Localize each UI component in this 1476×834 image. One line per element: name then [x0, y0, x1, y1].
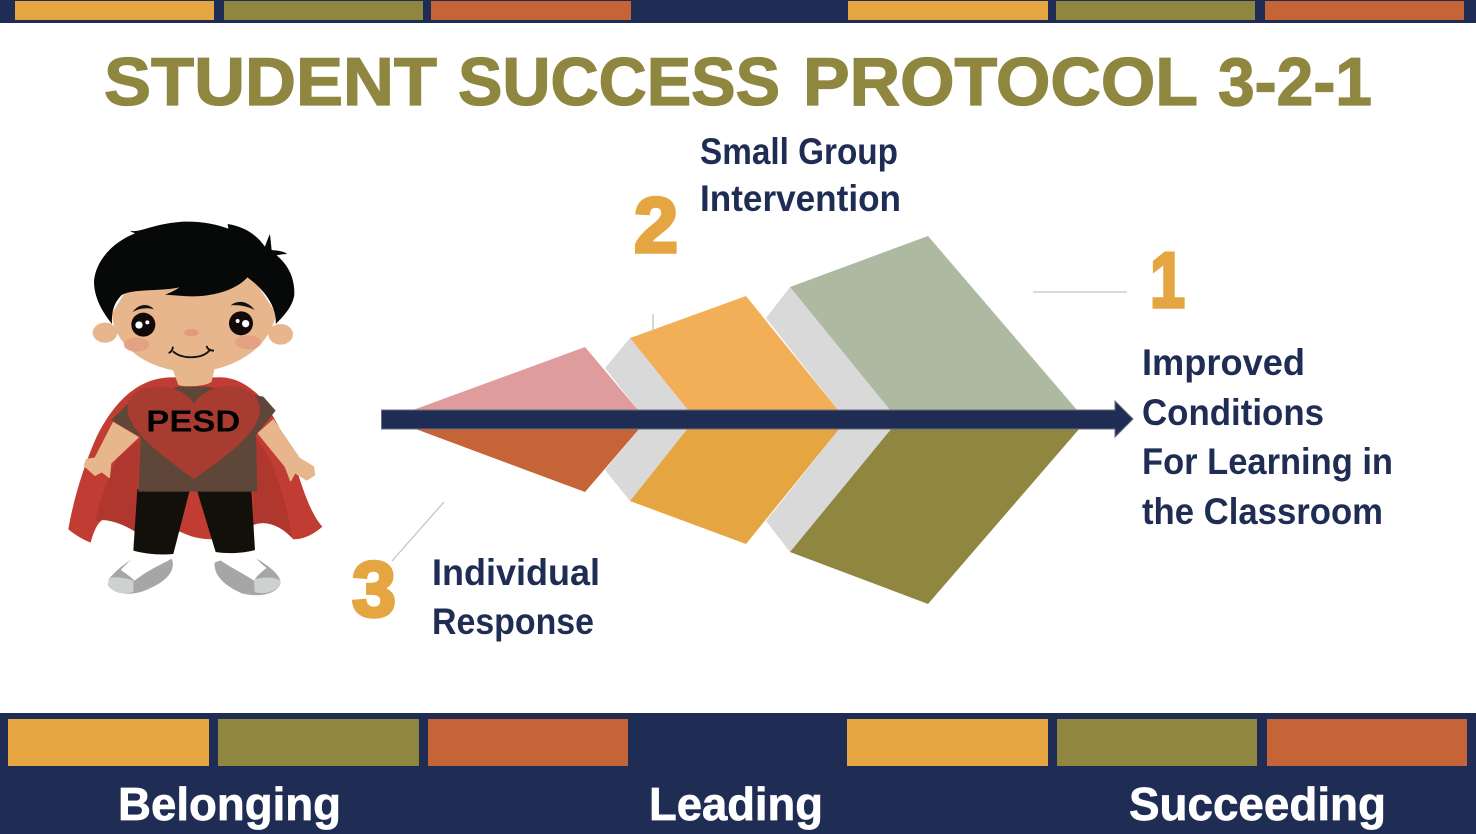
label: improved conditions: For Learning in	[1142, 441, 1393, 482]
label: improved conditions: the Classroom	[1142, 491, 1383, 532]
number 2: 2	[634, 181, 678, 269]
shoes	[108, 557, 173, 594]
label: individual response	[432, 552, 600, 642]
title	[104, 44, 1372, 120]
title: STUDENT	[104, 44, 437, 120]
cape shading	[95, 433, 292, 537]
chevron diagram	[413, 236, 1080, 604]
footer word: leading: Leading	[649, 778, 823, 830]
segment 2: orange	[630, 296, 838, 410]
number 1: 1	[1150, 236, 1185, 324]
title: PROTOCOL	[803, 44, 1198, 120]
heart with PESD: PESD	[146, 405, 240, 439]
face: eyes, brows, cheeks, nose, mouth	[124, 302, 261, 357]
label: individual response: Response	[432, 601, 594, 642]
label: small group intervention	[700, 131, 901, 219]
heart with PESD	[127, 386, 260, 479]
number 3: 3	[352, 545, 396, 633]
title: 3-2-1	[1218, 44, 1372, 120]
label: small group intervention: Intervention	[700, 178, 901, 219]
title: SUCCESS	[458, 44, 780, 120]
segment 1: green	[790, 236, 1077, 410]
label: individual response: Individual	[432, 552, 600, 593]
legs	[133, 489, 190, 554]
leader lines	[392, 292, 1127, 561]
label: small group intervention: Small Group	[700, 131, 898, 172]
label: improved conditions: Conditions	[1142, 392, 1324, 433]
illustration: superhero boy with PESD heart	[68, 222, 322, 595]
hair	[94, 222, 294, 324]
footer word: succeeding: Succeeding	[1129, 778, 1386, 830]
footer word: belonging: Belonging	[118, 778, 341, 830]
arms	[84, 423, 138, 477]
segment 3: pink and rust	[413, 347, 638, 410]
grey connectors	[605, 338, 688, 410]
arrow	[382, 401, 1133, 437]
bottom band	[0, 713, 1476, 834]
shirt	[111, 387, 276, 492]
cape	[68, 377, 322, 543]
top colour band	[0, 0, 1476, 23]
neck and head	[172, 367, 215, 386]
label: improved conditions	[1142, 342, 1393, 532]
label: improved conditions: Improved	[1142, 342, 1305, 383]
